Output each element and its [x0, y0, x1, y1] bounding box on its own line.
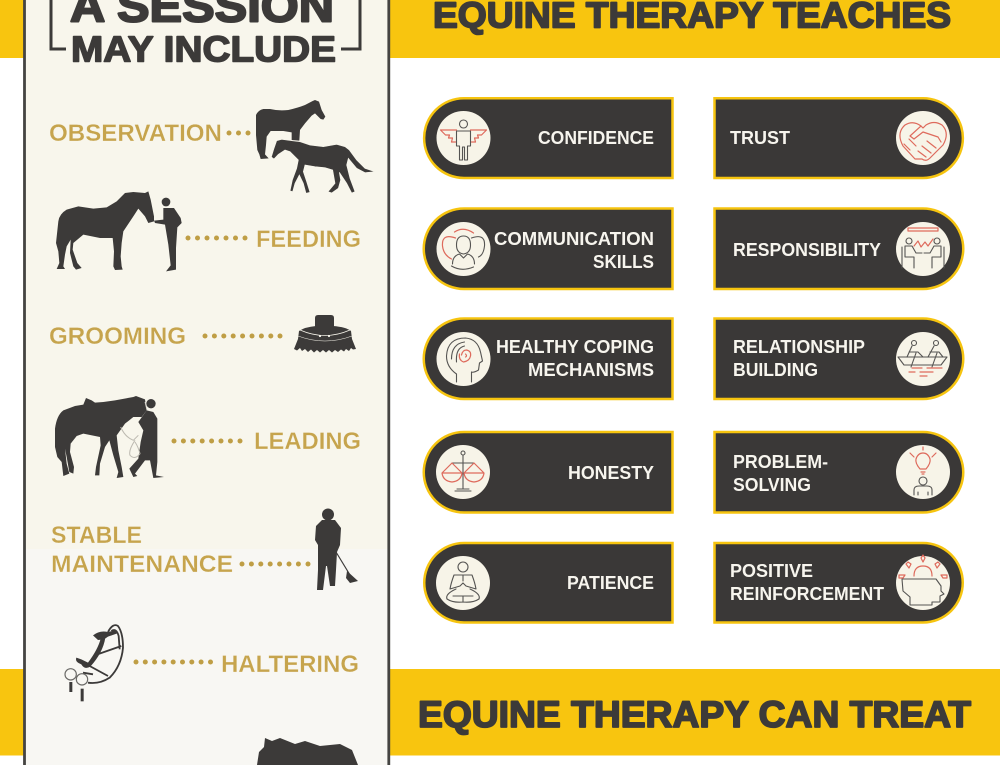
panel: a session may include: [24, 0, 389, 765]
pill: problem-solving: SOLVING: [733, 475, 811, 495]
pill: problem-solving: [714, 432, 963, 512]
icon: two people rowing: [898, 340, 947, 376]
pill: honesty: HONESTY: [568, 463, 654, 483]
top yellow band: [0, 0, 1000, 58]
pill: responsibility: RESPONSIBILITY: [733, 240, 881, 260]
pill: positive reinforcement: POSITIVE: [730, 561, 813, 581]
pill: trust: TRUST: [730, 128, 790, 148]
activity: feeding: FEEDING: [256, 226, 361, 253]
icon: people at a table: [902, 228, 944, 268]
activity: feeding: [56, 191, 361, 271]
panel heading: [51, 0, 360, 70]
activity: stable maintenance: STABLE: [51, 522, 142, 549]
activity: leading: LEADING: [254, 428, 361, 455]
icon: meditating person: [447, 562, 479, 602]
activity: observation: OBSERVATION: [49, 120, 222, 147]
icon: person with wings: [440, 120, 486, 160]
pill: confidence: CONFIDENCE: [538, 128, 654, 148]
pill: patience: [424, 543, 672, 622]
panel heading: MAY INCLUDE: [71, 28, 336, 70]
icon: communicating people: [442, 229, 485, 269]
pill: honesty: [424, 432, 672, 512]
activity: grooming: GROOMING: [49, 323, 186, 350]
pill: healthy coping mechanisms: [424, 318, 672, 399]
pill: relationship building: BUILDING: [733, 360, 818, 380]
pill: healthy coping mechanisms: HEALTHY COPING: [496, 337, 654, 357]
icon: balance scales: [442, 451, 484, 491]
activity: haltering: HALTERING: [221, 651, 359, 678]
activity: haltering: [65, 625, 359, 701]
icon: head with spiral: [446, 338, 482, 382]
activity: stable maintenance: [51, 508, 358, 590]
pill: communication skills: COMMUNICATION: [494, 229, 654, 249]
activity: observation: [49, 100, 375, 193]
bottom yellow band: [0, 669, 1000, 756]
activity: leading: [55, 396, 361, 478]
pill: communication skills: [424, 208, 672, 289]
heading: equine therapy can treat: EQUINE THERAPY CAN TREAT: [418, 694, 971, 735]
pill: healthy coping mechanisms: MECHANISMS: [528, 360, 654, 380]
activity: grooming: [49, 315, 356, 352]
pill: patience: PATIENCE: [567, 573, 654, 593]
pill: relationship building: [714, 318, 963, 399]
pill: positive reinforcement: [714, 543, 963, 622]
silhouette: cropped horse: [257, 738, 358, 765]
pill: problem-solving: PROBLEM-: [733, 452, 828, 472]
pill: relationship building: RELATIONSHIP: [733, 337, 865, 357]
pill: trust: [714, 98, 963, 178]
pill: responsibility: [714, 208, 963, 289]
pill: communication skills: SKILLS: [593, 252, 654, 272]
pill: confidence: [424, 98, 672, 178]
icon: heart handshake: [900, 122, 946, 160]
icon: head with radiating ideas: [899, 555, 947, 605]
activity: stable maintenance: MAINTENANCE: [51, 551, 233, 578]
pill: positive reinforcement: REINFORCEMENT: [730, 584, 884, 604]
icon: person with lightbulb: [910, 447, 936, 495]
